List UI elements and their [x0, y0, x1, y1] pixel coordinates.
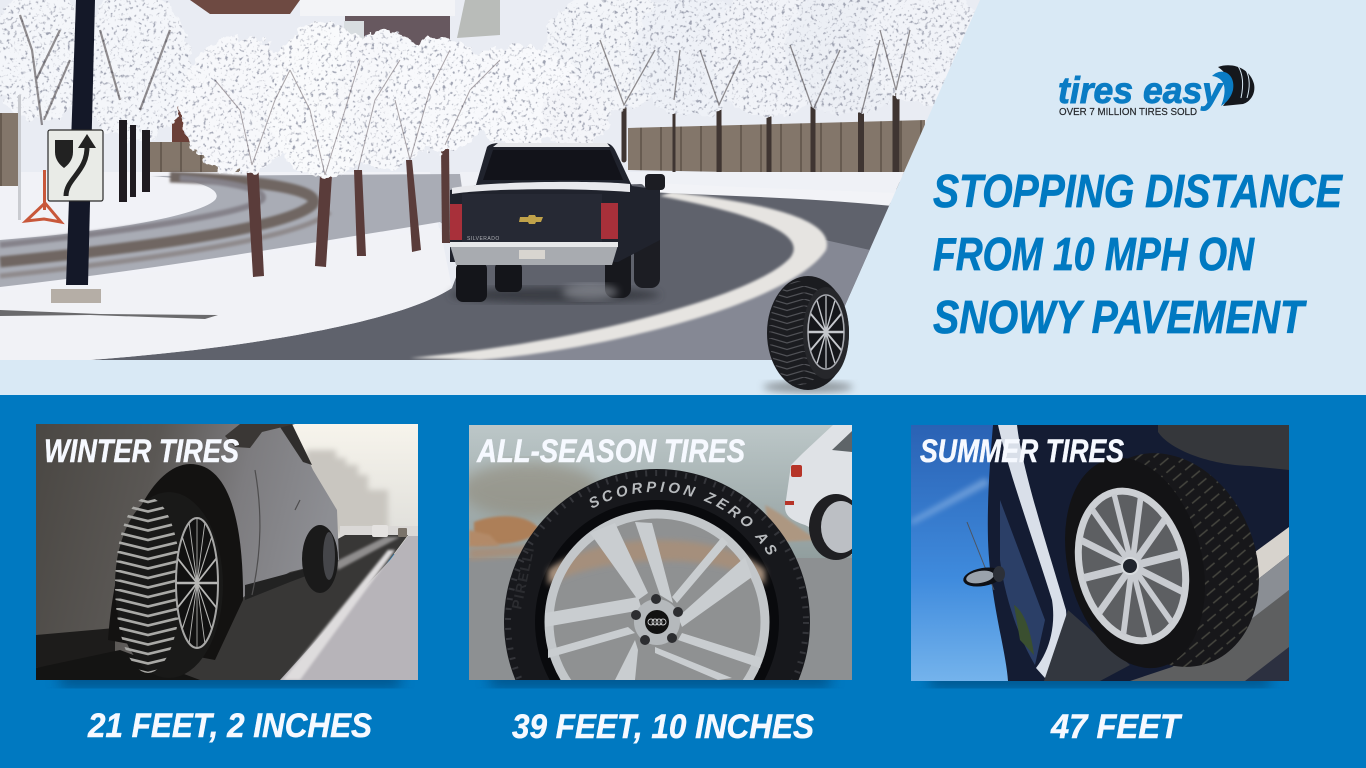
audi rings badge [648, 619, 666, 625]
title: FROM 10 MPH ON [933, 228, 1255, 280]
road sign pole [66, 0, 95, 285]
rear window [483, 150, 623, 180]
shadow [450, 287, 660, 303]
panel: summer tires photo [911, 425, 1290, 694]
distant cars [372, 525, 388, 537]
side mirror [225, 424, 295, 448]
houses [172, 0, 500, 145]
model badge: SILVERADO [467, 236, 500, 242]
rim ring [549, 514, 765, 730]
foggy background [469, 425, 852, 565]
frosted branches [20, 15, 910, 125]
tire tread [767, 276, 849, 390]
curb [1255, 527, 1289, 580]
car body [988, 425, 1289, 681]
logo tire icon [1212, 65, 1254, 106]
wooden fences [150, 120, 925, 176]
hero photo: snowy road with pickup truck [0, 0, 985, 360]
bumper top right [1158, 425, 1289, 470]
hazy sky and buildings [292, 424, 418, 554]
back road [0, 174, 470, 287]
pole base [51, 289, 101, 303]
white SUV [785, 425, 863, 560]
frosted tree canopies [180, 22, 609, 178]
background frosted trees [0, 0, 985, 140]
front wheel arch [108, 464, 243, 660]
snow on roof and rails [493, 143, 610, 147]
title [933, 165, 1343, 343]
front tire [115, 492, 223, 678]
hub cap [1122, 558, 1138, 574]
front rim [176, 518, 218, 648]
bumper [450, 247, 618, 265]
asphalt [1130, 590, 1289, 681]
logo: tires easy [1058, 65, 1254, 118]
pickup truck [450, 143, 665, 303]
bowtie badge [519, 215, 543, 224]
road surface [469, 558, 852, 680]
title: SNOWY PAVEMENT [933, 291, 1307, 343]
rear wheel [302, 525, 338, 593]
rocks [469, 505, 818, 560]
lower bumper [36, 628, 115, 668]
sidewall [1044, 443, 1226, 683]
caption: all-season stopping distance: 39 FEET, 10 INCHES [512, 708, 814, 746]
sidewall [803, 287, 849, 379]
orange sign stand [26, 203, 61, 222]
panel: winter tires photo [36, 424, 418, 680]
logo tagline: OVER 7 MILLION TIRES SOLD [1059, 106, 1197, 118]
silver rim [1063, 480, 1201, 652]
rim opening [545, 510, 769, 734]
windshield pillar and window [278, 424, 312, 465]
white body stripe [998, 425, 1066, 678]
antenna [967, 522, 994, 590]
background tree trunks [624, 85, 896, 186]
tailgate [462, 194, 602, 242]
white post [18, 95, 21, 220]
cab [450, 143, 660, 262]
exhaust mist [562, 284, 618, 300]
tire shadow [763, 381, 853, 393]
hub and wheel nuts [634, 599, 680, 645]
rim spokes [545, 522, 762, 680]
main road [90, 184, 900, 360]
summer tire tread [1050, 426, 1290, 694]
canopy twigs [215, 50, 500, 175]
logo wordmark: tires easy [1058, 70, 1224, 111]
page background [0, 0, 1366, 395]
label: winter tires: WINTER TIRES [44, 433, 240, 469]
road [134, 535, 408, 680]
road sign [48, 130, 103, 201]
label: summer tires: SUMMER TIRES [920, 433, 1125, 469]
lower door sill [245, 555, 335, 600]
photo shadows [60, 672, 1270, 687]
brand lettering: PIRELLI [508, 545, 537, 611]
caption: summer stopping distance: 47 FEET [1050, 708, 1183, 746]
panel: all-season tires photo [469, 425, 852, 680]
front snow bank [90, 288, 452, 360]
lower sill [1044, 610, 1130, 681]
icon: featured winter tire [763, 276, 853, 393]
left background trunks [119, 120, 150, 202]
caption: winter stopping distance: 21 FEET, 2 INCHES [87, 707, 372, 745]
label: all-season tires: ALL-SEASON TIRES [476, 433, 746, 469]
snowy ground [150, 172, 240, 175]
tree trunks [246, 145, 450, 277]
side mirror [962, 565, 1005, 589]
taillights [450, 204, 462, 240]
rim [808, 295, 844, 369]
sidewall lettering: SCORPION ZERO AS [590, 482, 776, 554]
door seam [252, 470, 300, 595]
main tire [504, 469, 810, 768]
car body [36, 424, 339, 680]
wing mirror [645, 174, 665, 190]
far curb snow [642, 184, 890, 206]
panel: blue comparison band [0, 395, 1366, 768]
snow streak on road [410, 192, 827, 360]
rear and front wheels [456, 262, 487, 302]
sky [911, 425, 1011, 681]
